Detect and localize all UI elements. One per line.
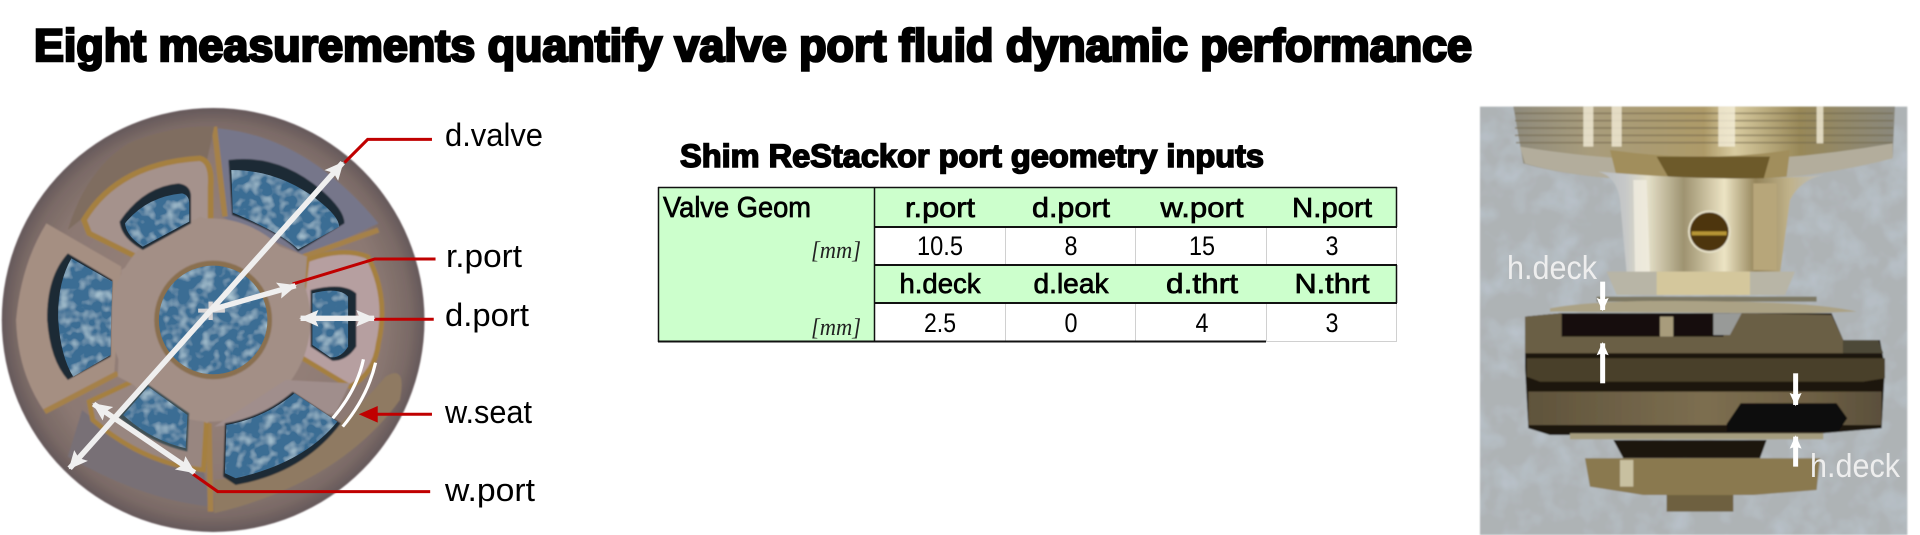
unit: mm lower: [mm]	[811, 315, 861, 341]
header row 2	[900, 268, 1370, 299]
values row 1: 15	[1189, 231, 1215, 261]
header row 1	[905, 192, 1372, 223]
values row 1: 3	[1326, 231, 1338, 261]
header row 2: h.deck	[900, 268, 981, 299]
blue ports	[58, 170, 348, 478]
panel: port geometry table	[658, 187, 1397, 342]
label: w.port: w.port	[444, 472, 535, 508]
header row 2: d.thrt	[1166, 268, 1238, 299]
header row 2: d.leak	[1034, 268, 1110, 299]
header row 2: N.thrt	[1294, 268, 1370, 299]
h.deck white arrows	[1603, 282, 1796, 467]
header row 1: d.port	[1032, 192, 1110, 223]
row header: Valve Geom: Valve Geom	[663, 192, 811, 224]
label: w.seat: w.seat	[444, 394, 532, 430]
values row 2: 0	[1064, 308, 1078, 338]
valve disc illustration	[2, 108, 424, 532]
side photo: body backing	[1525, 313, 1885, 435]
white dimension arrows	[70, 163, 376, 473]
label: d.port: d.port	[445, 297, 529, 333]
red leader lines	[193, 139, 436, 492]
values row 2: 3	[1326, 308, 1338, 338]
icon: w.seat red arrow head	[359, 406, 378, 423]
label: r.port: r.port	[446, 238, 522, 274]
heading: table title: Shim ReStackor port geometry inputs	[680, 138, 1264, 174]
header row 1: w.port	[1159, 192, 1244, 223]
label: h.deck upper: h.deck	[1507, 249, 1597, 286]
title: Eight measurements quantify valve port fluid dynamic performance	[34, 20, 1472, 71]
header row 1: r.port	[905, 192, 975, 223]
label: h.deck lower: h.deck	[1810, 447, 1900, 484]
values row 1	[917, 231, 1338, 261]
values row 2: 2.5	[924, 308, 956, 338]
label: d.valve: d.valve	[445, 117, 543, 153]
values row 2: 4	[1196, 308, 1208, 338]
values row 1: 10.5	[917, 231, 963, 261]
values row 2	[924, 308, 1338, 338]
panel: valve side photo with h.deck	[1480, 107, 1907, 535]
unit: mm upper: [mm]	[811, 238, 861, 264]
panel: valve face photo with measurements	[2, 108, 543, 532]
header row 1: N.port	[1292, 192, 1372, 223]
side photo illustration	[1480, 107, 1907, 535]
values row 1: 8	[1064, 231, 1078, 261]
